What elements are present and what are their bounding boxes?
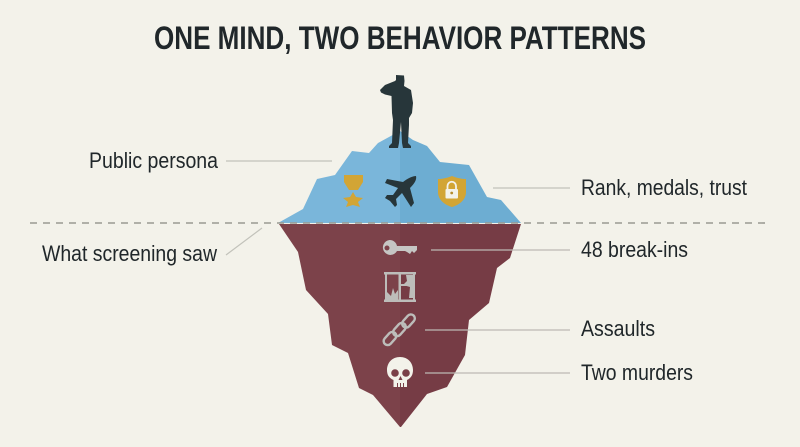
label: What screening saw [42,228,262,266]
label: Two murders: Two murders [581,360,693,385]
iceberg above water [278,131,521,223]
icon: medal [343,175,363,207]
label: What screening saw: What screening saw [42,241,218,266]
title: ONE MIND, TWO BEHAVIOR PATTERNS [154,20,646,56]
icon: airplane [385,176,416,207]
icon: saluting soldier [380,75,413,148]
icon: chain [382,313,416,347]
iceberg below water [279,224,521,427]
icon: key [383,240,417,255]
icon: skull [387,357,413,387]
icon: shield with padlock [438,176,466,207]
label: Public persona: Public persona [89,148,218,173]
label: Rank, medals, trust: Rank, medals, trust [581,175,748,200]
label: Assaults: Assaults [581,316,655,341]
icon: broken window [384,272,416,302]
label: 48 break-ins: 48 break-ins [581,237,688,262]
waterline [30,222,770,224]
